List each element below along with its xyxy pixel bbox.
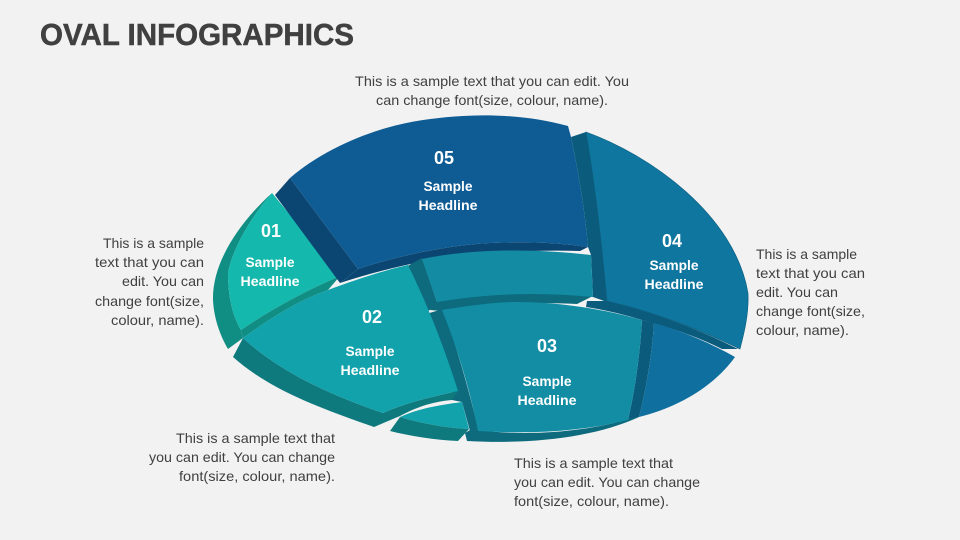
- segment 05: Sample: [424, 178, 473, 194]
- text block: bottom right: This is a sample text that: [514, 455, 673, 471]
- middle arc segment: [404, 250, 593, 312]
- text block: left: change font(size,: [95, 293, 204, 309]
- text block: bottom right: [514, 455, 700, 509]
- text block: right: edit. You can: [756, 284, 838, 300]
- segment 01: 01: [261, 221, 281, 241]
- text block: top: This is a sample text that you can edit. You: [355, 73, 629, 89]
- segment 03: Headline: [518, 392, 577, 408]
- text block: right: text that you can: [756, 265, 865, 281]
- text block: bottom left: font(size, colour, name).: [179, 468, 335, 484]
- text block: left: text that you can: [95, 254, 204, 270]
- segment 04: Sample: [650, 257, 699, 273]
- segment 02: Headline: [340, 362, 400, 378]
- text block: left: edit. You can: [122, 273, 204, 289]
- segment 05: Headline: [418, 197, 478, 213]
- text block: right: colour, name).: [756, 322, 849, 338]
- text block: bottom left: you can edit. You can change: [149, 449, 335, 465]
- text block: right: change font(size,: [756, 303, 865, 319]
- segment 03: 03: [537, 336, 557, 356]
- lower right blue segment: [628, 320, 735, 420]
- text block: top: [355, 73, 629, 108]
- text block: bottom left: This is a sample text that: [176, 430, 335, 446]
- text block: left: This is a sample: [103, 235, 204, 251]
- text block: left: colour, name).: [111, 312, 204, 328]
- text block: left: [95, 235, 204, 328]
- segment 01: [213, 193, 340, 349]
- text block: bottom right: font(size, colour, name).: [514, 493, 669, 509]
- segment 03: [426, 302, 642, 442]
- text block: top: can change font(size, colour, name).: [376, 92, 608, 108]
- segment 03: Sample: [522, 373, 572, 389]
- segment 04: Headline: [644, 276, 704, 292]
- segment 05: 05: [434, 148, 454, 168]
- text block: right: This is a sample: [756, 246, 857, 262]
- segment 01: Headline: [240, 273, 300, 289]
- segment 04: 04: [662, 231, 682, 251]
- segment 02: Sample: [346, 343, 395, 359]
- text block: right: [756, 246, 865, 338]
- segment 04: [571, 132, 748, 349]
- title: OVAL INFOGRAPHICS: [40, 18, 354, 52]
- segment 02: 02: [362, 307, 382, 327]
- oval diagram: [213, 115, 748, 442]
- text block: bottom left: [149, 430, 335, 484]
- segment 02: [233, 265, 458, 427]
- text block: bottom right: you can edit. You can change: [514, 474, 700, 490]
- small lower segment: [390, 402, 469, 441]
- segment 05: [275, 115, 588, 283]
- segment 01: Sample: [246, 254, 295, 270]
